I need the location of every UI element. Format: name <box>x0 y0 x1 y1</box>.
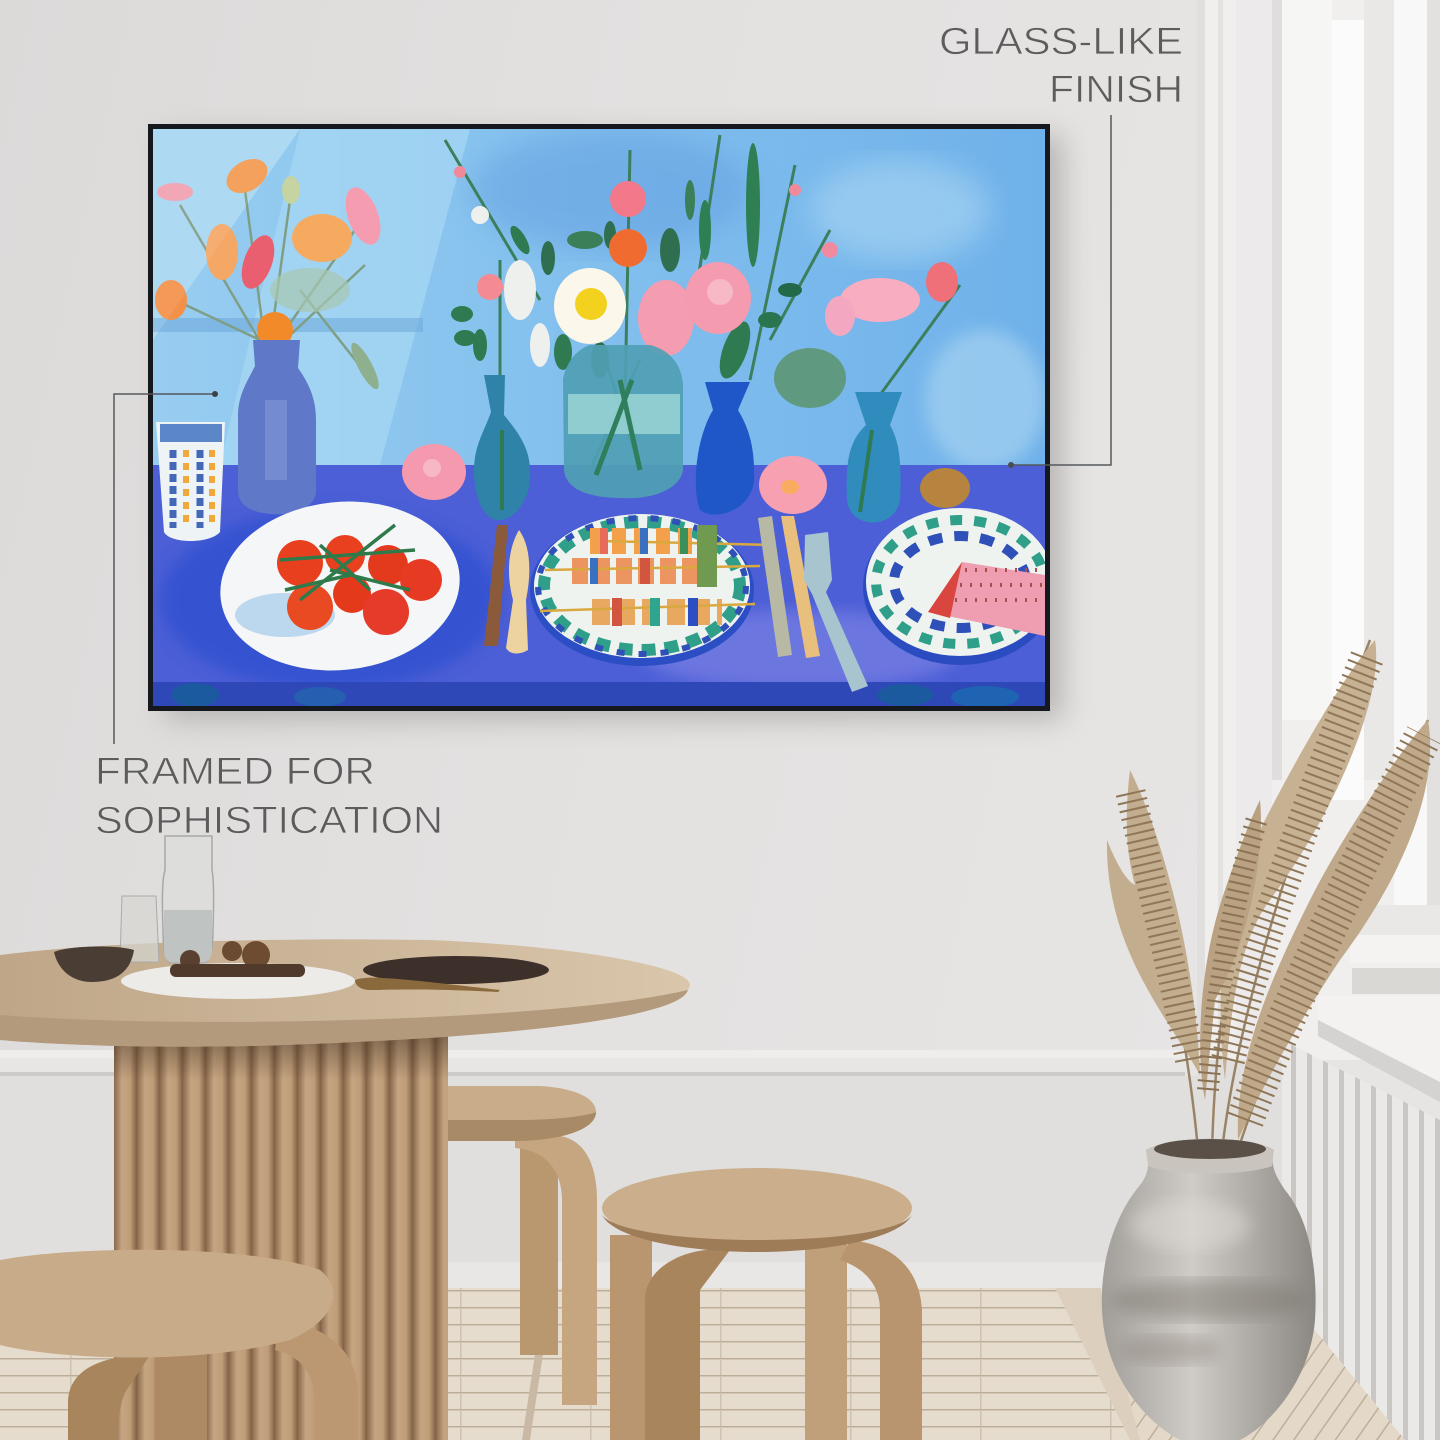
callout: glass-like finish <box>939 21 1183 468</box>
blue bottle left <box>238 340 316 514</box>
table <box>153 465 1045 706</box>
floor <box>0 1288 1440 1440</box>
patterned glass <box>156 422 225 541</box>
loose roses and bread <box>402 444 970 514</box>
centre plate of skewers <box>530 514 775 666</box>
centre flowers stems and leaves <box>445 135 960 470</box>
callout: framed for sophistication <box>95 391 443 842</box>
table base <box>114 1030 448 1440</box>
lower wall panel and chair rail <box>0 1050 1200 1290</box>
black frame <box>148 124 1050 711</box>
vases <box>474 345 902 522</box>
front centre stool <box>602 1168 922 1440</box>
frame shadow <box>165 135 1063 720</box>
back stool <box>448 1086 597 1405</box>
pampas grass <box>1107 640 1430 1150</box>
cutlery <box>484 516 868 692</box>
callout: glass-like finish: FINISH <box>1049 69 1183 111</box>
callout: framed for sophistication: SOPHISTICATION <box>95 800 443 842</box>
table objects <box>54 941 549 999</box>
callout: framed for sophistication: FRAMED FOR <box>95 751 375 793</box>
right plate with cake <box>863 508 1057 665</box>
glass carafe and tumbler <box>120 836 214 963</box>
window and white trim <box>1197 0 1440 1290</box>
left bouquet <box>155 152 387 392</box>
ceramic floor vase <box>1102 1139 1316 1440</box>
callout label top right: GLASS-LIKE <box>939 21 1183 63</box>
framed painting <box>148 124 1063 720</box>
radiator <box>1282 1040 1440 1440</box>
tomato plate <box>220 502 460 670</box>
glass sheen <box>153 159 268 332</box>
window sill <box>1318 996 1440 1102</box>
painting canvas <box>153 129 1057 708</box>
front left stool <box>0 1250 358 1440</box>
round table top <box>0 939 690 1047</box>
